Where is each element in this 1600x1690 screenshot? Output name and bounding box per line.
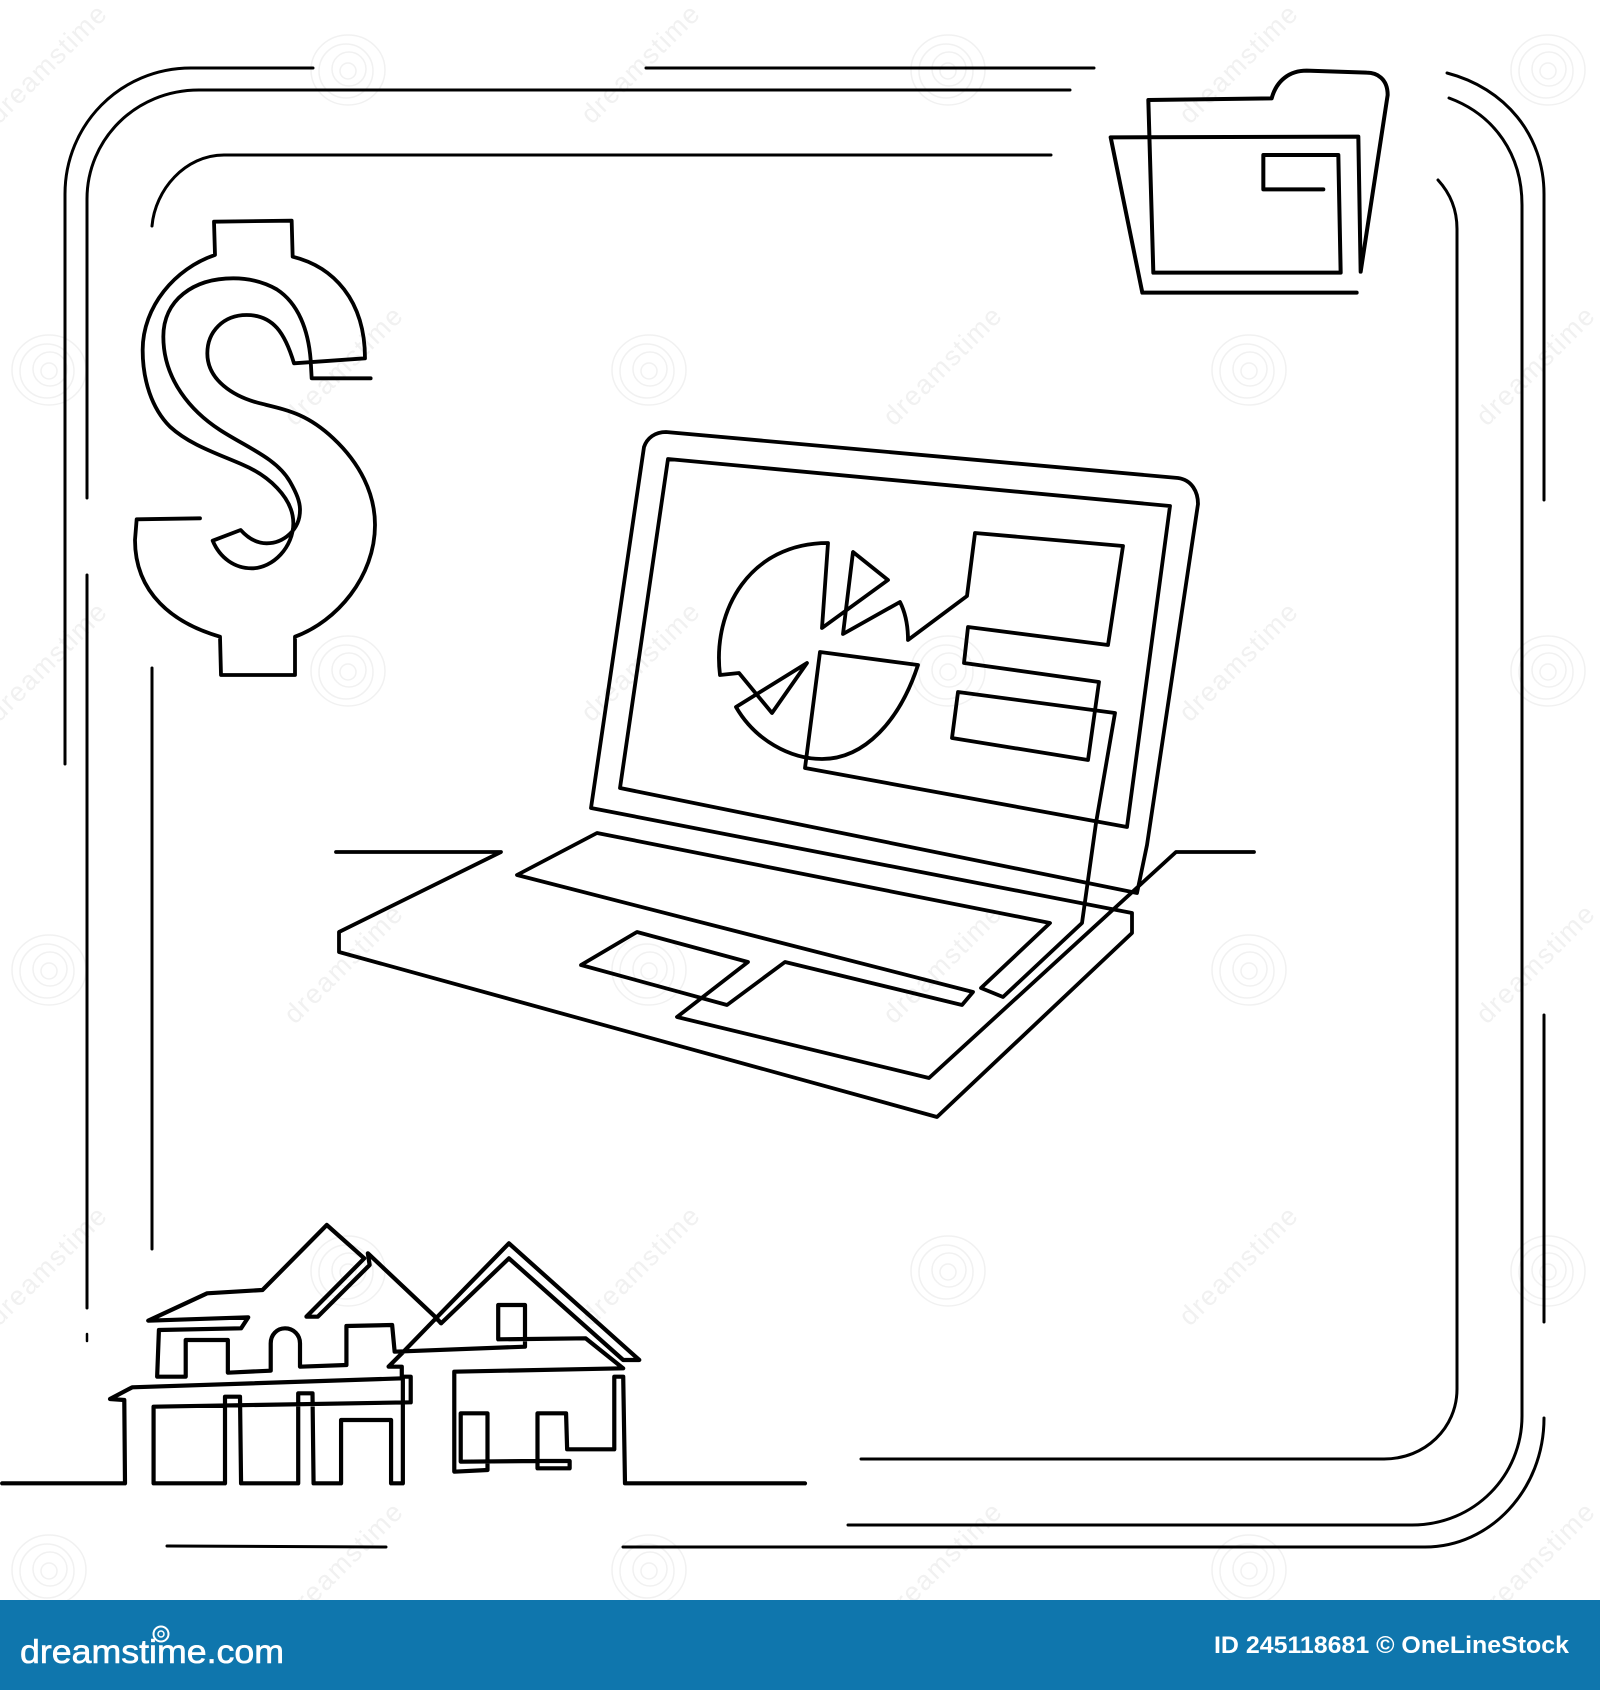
footer band <box>0 1600 1600 1690</box>
laptop with pie chart on screen <box>336 432 1254 1117</box>
watermark: spirals and dreamstime text: dreamstime <box>1470 300 1600 431</box>
icon: folder <box>1111 71 1388 293</box>
watermark: spirals and dreamstime text: dreamstime <box>575 1200 706 1331</box>
watermark: spirals and dreamstime text: dreamstime <box>575 0 706 129</box>
footer logo: dreamstime.com: dreamstime.com <box>20 1633 284 1670</box>
watermark: spirals and dreamstime text: dreamstime <box>278 300 409 431</box>
watermark: spirals and dreamstime text: dreamstime <box>1470 898 1600 1029</box>
watermark: spirals and dreamstime text: dreamstime <box>877 300 1008 431</box>
watermark: spirals and dreamstime text: dreamstime <box>1470 1496 1600 1627</box>
watermark: spirals and dreamstime text: dreamstime <box>278 898 409 1029</box>
watermark: spirals and dreamstime text: dreamstime <box>1173 1200 1304 1331</box>
houses with ground line <box>2 1225 805 1483</box>
watermark: spirals and dreamstime text: dreamstime <box>877 898 1008 1029</box>
watermark: spirals and dreamstime text: dreamstime <box>1173 0 1304 129</box>
watermark: spirals and dreamstime text: dreamstime <box>575 596 706 727</box>
watermark: spirals and dreamstime text: dreamstime <box>877 1496 1008 1627</box>
icon: dollar sign <box>135 221 375 675</box>
watermark: spirals and dreamstime text: dreamstime <box>278 1496 409 1627</box>
footer credit: ID 245118681 © OneLineStock <box>1214 1632 1570 1659</box>
watermark: spirals and dreamstime text: dreamstime <box>1173 596 1304 727</box>
